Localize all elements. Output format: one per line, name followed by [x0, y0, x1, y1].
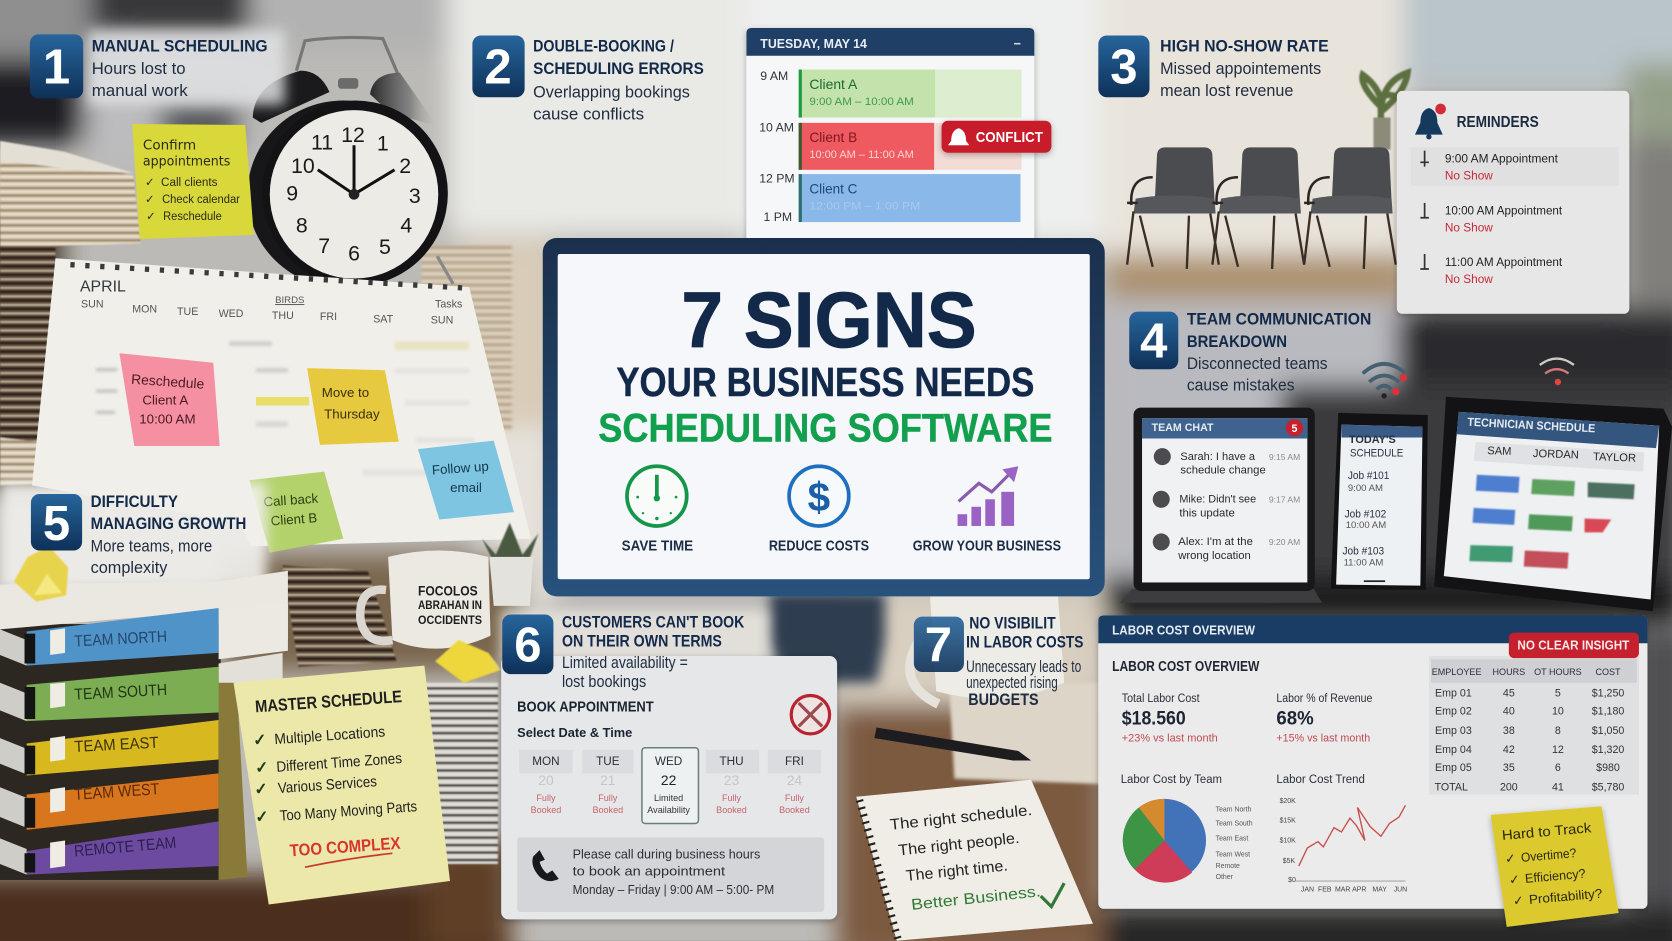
heading 5: difficulty managing growth: DIFFICULTY — [91, 492, 179, 511]
wall calendar: WED — [219, 308, 244, 320]
labor table: HOURS — [1493, 667, 1525, 677]
heading 4: team communication: TEAM COMMUNICATION — [1187, 309, 1371, 328]
labor table: Emp 01 — [1435, 688, 1472, 700]
sticky note: call back client B — [250, 472, 343, 553]
badge 2: 2 — [484, 40, 512, 94]
KPI: labor percent of revenue: 68% — [1276, 708, 1314, 729]
heading 2: double-booking: Overlapping bookings — [533, 82, 690, 101]
trend chart: MAY — [1372, 887, 1387, 894]
panel: reminders — [1397, 91, 1629, 314]
sticky note: confirm appointments: appointments — [143, 155, 230, 170]
laptop: team chat: wrong location — [1177, 550, 1251, 562]
icon: alarm clock: 3 — [409, 184, 421, 208]
wall calendar: APRIL — [80, 278, 126, 295]
notepad with message: The right schedule. — [889, 802, 1033, 834]
laptop: team chat: TEAM CHAT — [1152, 422, 1214, 434]
badge 3 — [1098, 35, 1150, 97]
heading 5: difficulty managing growth: complexity — [91, 558, 168, 577]
labor table: $1,320 — [1592, 744, 1624, 756]
date selector: 22 — [661, 772, 677, 788]
labor table: $1,050 — [1592, 725, 1624, 737]
crumpled papers — [14, 546, 501, 683]
panel: labor cost dashboard: LABOR COST OVERVIEW — [1112, 659, 1260, 675]
sticky note: confirm appointments: Call clients — [161, 176, 218, 189]
tablet: technician schedule — [1434, 397, 1672, 611]
client C booking — [799, 174, 1020, 222]
icon: alarm clock: 8 — [296, 214, 308, 238]
laptop: team chat: 9:17 AM — [1269, 494, 1300, 504]
master schedule note — [219, 666, 450, 904]
stacked team binders: REMOTE TEAM — [74, 835, 177, 860]
date selector: Fully — [598, 793, 618, 803]
master schedule note: ✓ — [254, 781, 268, 799]
laptop: team chat: this update — [1179, 507, 1235, 519]
icon: save time clock — [627, 466, 687, 526]
pie chart: Team South — [1216, 821, 1253, 828]
monitor stand — [770, 592, 885, 683]
panel: reminders: No Show — [1445, 169, 1493, 182]
client C booking: 12:00 PM – 1:00 PM — [809, 200, 920, 212]
badge 2 — [472, 35, 525, 97]
benefit labels: GROW YOUR BUSINESS — [913, 537, 1061, 554]
badge 4 — [1129, 312, 1178, 369]
panel: booking form: Select Date & Time — [517, 725, 632, 740]
notepad with message: The right time. — [905, 857, 1009, 885]
laptop: team chat: Mike: Didn't see — [1179, 493, 1256, 505]
date selector: WED — [655, 755, 682, 768]
trend chart: $15K — [1280, 817, 1296, 824]
labor table: COST — [1595, 667, 1621, 677]
trend chart: FEB — [1318, 887, 1332, 894]
icon: reduce costs dollar — [789, 466, 849, 526]
trend chart — [1276, 772, 1407, 894]
master schedule note: ✓ — [255, 809, 269, 826]
date selector: FRI — [785, 755, 804, 768]
sticky note: confirm appointments: ✓ — [146, 210, 156, 223]
heading 4: team communication: BREAKDOWN — [1187, 332, 1287, 351]
date selector: Limited — [654, 793, 683, 803]
icon: reduce costs dollar: $ — [808, 474, 830, 520]
icon: alarm clock: 9 — [286, 182, 298, 206]
icon: alarm clock: 5 — [379, 235, 391, 259]
wall calendar: THU — [272, 310, 294, 322]
wall calendar: TUE — [177, 306, 198, 318]
wall calendar: FRI — [320, 311, 337, 323]
labor table: Emp 04 — [1435, 744, 1472, 756]
tablet: technician schedule: JORDAN — [1533, 448, 1579, 462]
icon: alarm clock: 4 — [400, 214, 412, 238]
wall calendar: Tasks — [435, 298, 462, 310]
date selector: Booked — [592, 805, 623, 815]
stacked team binders: TEAM NORTH — [74, 629, 167, 650]
sticky note: hard to track — [1491, 806, 1619, 927]
heading 2: double-booking: cause conflicts — [533, 105, 644, 124]
plant and mug with text: ABRAHAN IN — [418, 599, 482, 612]
trend chart: $10K — [1280, 838, 1296, 845]
date selector: Fully — [722, 793, 742, 803]
heading 6: customers can't book: ON THEIR OWN TERMS — [562, 631, 722, 650]
panel: booking form — [501, 610, 837, 919]
panel: day calendar with conflict: 1 PM — [763, 210, 792, 224]
heading 6: customers can't book: Limited availability = — [562, 653, 688, 672]
client B booking: 10:00 AM – 11:00 AM — [809, 149, 914, 161]
heading 7: no visibility: NO VISIBILIT — [969, 613, 1056, 632]
sticky note: move to Thursday — [307, 368, 399, 445]
master schedule note: TOO COMPLEX — [289, 834, 402, 860]
labor table: 41 — [1552, 781, 1564, 793]
labor table: TOTAL — [1435, 781, 1468, 793]
trend chart: MAR — [1335, 887, 1350, 894]
badge 5 — [31, 494, 82, 551]
tablet: technician schedule: TECHNICIAN SCHEDULE — [1467, 416, 1596, 435]
trend chart: Labor Cost Trend — [1276, 772, 1365, 786]
icon: alarm clock: 6 — [348, 241, 360, 265]
heading 6: customers can't book: CUSTOMERS CAN'T BOOK — [562, 612, 745, 631]
phone: today's schedule: SCHEDULE — [1350, 448, 1403, 460]
icon: alarm clock: 7 — [318, 234, 330, 258]
laptop: team chat: 9:15 AM — [1269, 452, 1300, 462]
date selector: 24 — [787, 772, 802, 788]
sticky note: follow up email — [418, 441, 514, 520]
heading 6: customers can't book — [502, 612, 745, 691]
tablet: technician schedule: SAM — [1487, 445, 1512, 458]
sticky note: call back client B: Client B — [270, 510, 318, 528]
trend chart: $0 — [1288, 877, 1296, 884]
panel: reminders: REMINDERS — [1457, 114, 1539, 131]
icon: bell — [1415, 104, 1446, 139]
master schedule note: Multiple Locations — [274, 723, 386, 748]
title: YOUR BUSINESS NEEDS — [616, 359, 1034, 405]
date selector: 20 — [538, 772, 554, 788]
sticky note: confirm appointments: Confirm — [143, 139, 196, 154]
sticky note: confirm appointments — [132, 124, 254, 239]
panel: labor cost dashboard: LABOR COST OVERVIEW — [1112, 623, 1255, 638]
heading panel 5 backdrop — [0, 482, 267, 589]
KPI: labor percent of revenue: +15% vs last month — [1276, 732, 1370, 744]
phone notice: Monday – Friday | 9:00 AM – 5:00- PM — [573, 882, 774, 897]
KPI: total labor cost — [1122, 692, 1218, 744]
notepad with message: The right people. — [898, 830, 1020, 859]
plant and mug with text: FOCOLOS — [418, 582, 478, 598]
heading 1: manual scheduling — [30, 30, 285, 105]
no clear insight badge: NO CLEAR INSIGHT — [1517, 638, 1629, 653]
icon: alarm clock: 10 — [291, 154, 315, 178]
sticky note: hard to track: Profitability? — [1528, 886, 1603, 907]
title — [598, 276, 1052, 451]
date selector: Fully — [785, 793, 804, 803]
wall calendar: SAT — [373, 313, 394, 325]
date selector: Booked — [779, 805, 810, 815]
badge 1: 1 — [43, 40, 70, 94]
stacked team binders: TEAM WEST — [74, 781, 160, 804]
labor table: Emp 05 — [1435, 762, 1472, 774]
panel: reminders: 9:00 AM Appointment — [1445, 152, 1559, 165]
labor table: $1,180 — [1592, 706, 1624, 718]
badge 6: 6 — [514, 618, 541, 672]
phone: today's schedule: Job #101 — [1348, 470, 1389, 482]
phone: today's schedule — [1331, 413, 1428, 590]
laptop: team chat: 9:20 AM — [1269, 537, 1300, 547]
phone: today's schedule: Job #103 — [1343, 546, 1384, 558]
labor table: 5 — [1555, 688, 1561, 700]
notepad with message: Better Business. — [910, 883, 1042, 914]
sticky note: reschedule: Reschedule — [131, 371, 205, 392]
wall calendar: MON — [132, 304, 157, 316]
heading 1: manual scheduling: Hours lost to — [92, 59, 186, 78]
panel: reminders: 11:00 AM Appointment — [1445, 256, 1563, 269]
sticky note: reschedule: 10:00 AM — [139, 412, 196, 427]
laptop: team chat: 5 — [1292, 423, 1298, 435]
panel: reminders: No Show — [1445, 273, 1493, 286]
icon: wifi broken — [1363, 364, 1407, 399]
icon: alarm clock: 11 — [311, 131, 333, 155]
labor table: EMPLOYEE — [1432, 667, 1481, 677]
heading 3: no-show rate: mean lost revenue — [1160, 81, 1293, 100]
badge 7: 7 — [925, 618, 952, 672]
KPI: total labor cost: Total Labor Cost — [1122, 692, 1200, 705]
title: 7 SIGNS — [681, 276, 977, 364]
no clear insight badge — [1509, 633, 1639, 658]
icon: wifi red — [1540, 359, 1574, 385]
date selector: THU — [719, 755, 744, 768]
sticky note: hard to track: ✓ — [1512, 892, 1524, 908]
icon: growth chart — [958, 466, 1018, 526]
heading 1: manual scheduling: MANUAL SCHEDULING — [92, 36, 268, 55]
notepad with message — [856, 780, 1093, 941]
phone: today's schedule: Job #102 — [1345, 508, 1386, 520]
heading 7: no visibility: Unnecessary leads to — [966, 657, 1081, 676]
laptop: team chat: Alex: I'm at the — [1178, 536, 1253, 548]
client A booking: 9:00 AM – 10:00 AM — [809, 96, 914, 108]
trend chart: APR — [1352, 887, 1366, 894]
mug behind sign 7 — [910, 587, 1064, 704]
heading 6: customers can't book: lost bookings — [562, 672, 646, 691]
client A booking — [799, 70, 1022, 118]
sticky note: follow up email: Follow up — [431, 459, 489, 478]
conflict badge: CONFLICT — [976, 129, 1043, 146]
phone notice — [517, 837, 824, 912]
phone notice: to book an appointment — [573, 864, 726, 879]
panel: day calendar with conflict: 9 AM — [760, 69, 788, 83]
waiting room chairs — [1127, 147, 1396, 269]
laptop: team chat: schedule change — [1180, 465, 1266, 477]
master schedule note: Various Services — [277, 773, 377, 797]
panel: day calendar with conflict — [746, 28, 1051, 247]
sticky note: follow up email: email — [450, 480, 482, 495]
laptop: team chat — [1120, 408, 1322, 603]
date selector: Fully — [536, 793, 556, 803]
pie chart: Labor Cost by Team — [1121, 772, 1222, 786]
sticky note: reschedule: Client A — [142, 392, 188, 407]
labor table — [1429, 656, 1639, 795]
pie chart: Remote — [1216, 863, 1240, 870]
KPI: total labor cost: +23% vs last month — [1122, 732, 1218, 744]
heading 5: difficulty managing growth: More teams, more — [91, 537, 212, 556]
tablet: technician schedule: TAYLOR — [1593, 451, 1636, 465]
panel: booking form: BOOK APPOINTMENT — [517, 698, 654, 715]
trend chart: JUN — [1394, 887, 1407, 894]
sticky note: hard to track: Hard to Track — [1501, 819, 1592, 843]
heading 7: no visibility — [914, 613, 1083, 709]
labor table: 6 — [1555, 762, 1561, 774]
heading 2: double-booking: DOUBLE-BOOKING / — [533, 36, 674, 55]
sticky note: move to Thursday: Thursday — [324, 406, 380, 421]
badge 6 — [502, 614, 553, 674]
sticky note: reschedule — [119, 353, 220, 446]
master schedule note: ✓ — [255, 759, 269, 777]
plant and mug with text — [360, 523, 538, 649]
badge 4: 4 — [1140, 314, 1168, 368]
badge 7 — [914, 617, 964, 672]
pie chart: Team East — [1216, 836, 1248, 843]
date selector: Booked — [531, 805, 561, 815]
panel: reminders: 10:00 AM Appointment — [1445, 205, 1563, 218]
labor table: 10 — [1552, 706, 1564, 718]
heading 5: difficulty managing growth — [31, 492, 246, 577]
master schedule note: MASTER SCHEDULE — [254, 687, 403, 716]
date selector — [519, 748, 821, 823]
date selector: TUE — [596, 755, 620, 768]
pie chart: Team North — [1216, 807, 1252, 814]
date selector: 21 — [600, 772, 616, 788]
heading 5: difficulty managing growth: MANAGING GROWTH — [91, 514, 246, 533]
labor table: 42 — [1503, 744, 1515, 756]
sticky note: hard to track: Efficiency? — [1524, 866, 1586, 886]
labor table: $980 — [1596, 762, 1620, 774]
heading 7: no visibility: unexpected rising — [966, 673, 1058, 692]
labor table: Emp 02 — [1435, 706, 1472, 718]
plant — [1362, 73, 1408, 150]
sticky note: call back client B: Call back — [263, 491, 319, 510]
phone: today's schedule: 9:00 AM — [1348, 483, 1383, 494]
phone: today's schedule: TODAY'S — [1349, 434, 1396, 446]
icon: alarm clock — [247, 37, 453, 288]
pie chart: Team West — [1216, 852, 1250, 859]
heading 4: team communication — [1129, 309, 1371, 395]
labor table: OT HOURS — [1534, 667, 1582, 677]
wall calendar: SUN — [81, 298, 104, 310]
sticky note: confirm appointments: ✓ — [145, 176, 155, 189]
trend chart: JAN — [1301, 887, 1314, 894]
sticky note: hard to track: Overtime? — [1520, 845, 1577, 865]
wall calendar: BIRDS — [275, 295, 304, 306]
phone: today's schedule: 10:00 AM — [1346, 520, 1386, 531]
heading 2: double-booking: SCHEDULING ERRORS — [533, 59, 704, 78]
icon: alarm clock: 2 — [399, 154, 411, 178]
sticky note: move to Thursday: Move to — [322, 385, 369, 400]
labor table: 200 — [1500, 781, 1518, 793]
laptop: team chat: Sarah: I have a — [1180, 451, 1256, 463]
stacked team binders: TEAM SOUTH — [74, 682, 167, 704]
stacked team binders: TEAM EAST — [74, 735, 159, 756]
heading 2: double-booking — [472, 35, 704, 124]
master schedule note: Too Many Moving Parts — [279, 798, 418, 825]
paper stacks — [0, 141, 512, 864]
labor table: 45 — [1503, 688, 1515, 700]
heading 1: manual scheduling: manual work — [92, 81, 188, 100]
labor table: 38 — [1503, 725, 1515, 737]
heading 7: no visibility: IN LABOR COSTS — [966, 633, 1083, 652]
panel: day calendar with conflict: 10 AM — [759, 120, 794, 134]
wall calendar: SUN — [431, 314, 453, 326]
date selector: Booked — [716, 805, 747, 815]
icon: unavailable — [791, 695, 830, 734]
trend chart: $5K — [1283, 858, 1295, 865]
heading 7: no visibility: BUDGETS — [968, 690, 1039, 709]
heading 3: no-show rate — [1098, 35, 1329, 100]
date selector: Availability — [647, 805, 690, 815]
trend chart: $20K — [1280, 798, 1296, 805]
heading 3: no-show rate: HIGH NO-SHOW RATE — [1160, 36, 1329, 55]
paper under mug and pen — [949, 683, 1100, 784]
stacked team binders — [0, 571, 288, 880]
title: SCHEDULING SOFTWARE — [598, 407, 1052, 451]
icon: alarm clock: 1 — [377, 132, 389, 156]
date selector: 23 — [724, 772, 739, 788]
heading 4: team communication: cause mistakes — [1187, 376, 1295, 395]
conflict badge — [942, 121, 1051, 153]
master schedule note: Different Time Zones — [276, 750, 403, 776]
labor table: $5,780 — [1592, 781, 1624, 793]
main monitor — [543, 238, 1105, 596]
date selector: MON — [532, 755, 560, 768]
panel: day calendar with conflict: TUESDAY, MAY 14 — [760, 36, 867, 51]
KPI: labor percent of revenue: Labor % of Revenue — [1276, 692, 1372, 705]
panel: labor cost dashboard — [1098, 616, 1647, 909]
phone notice: Please call during business hours — [573, 847, 760, 862]
heading 4: team communication: Disconnected teams — [1187, 354, 1328, 373]
labor table: $1,250 — [1592, 688, 1624, 700]
labor table: 12 — [1552, 744, 1564, 756]
client C booking: Client C — [809, 180, 857, 196]
sticky note: hard to track: ✓ — [1504, 850, 1516, 866]
labor table: 40 — [1503, 706, 1515, 718]
heading 3: no-show rate: Missed appointements — [1160, 59, 1321, 78]
KPI: total labor cost: $18.560 — [1122, 708, 1186, 729]
badge 5: 5 — [43, 497, 70, 551]
sticky note: confirm appointments: Reschedule — [163, 210, 222, 223]
icon: alarm clock: 12 — [341, 123, 365, 147]
KPI: labor percent of revenue — [1276, 692, 1372, 744]
pen — [874, 727, 1031, 761]
sticky note: confirm appointments: ✓ — [145, 193, 155, 206]
benefit labels: SAVE TIME — [622, 537, 693, 554]
pie chart — [1121, 772, 1253, 883]
labor table: 35 — [1503, 762, 1515, 774]
client B booking — [799, 123, 1022, 170]
pie chart: Other — [1216, 874, 1234, 881]
badge 3: 3 — [1110, 40, 1138, 94]
plant and mug with text: OCCIDENTS — [418, 613, 482, 627]
client B booking: Client B — [809, 129, 857, 145]
sticky note: confirm appointments: Check calendar — [162, 193, 240, 206]
labor table: 8 — [1555, 725, 1561, 737]
panel: reminders: No Show — [1445, 222, 1493, 235]
badge 1 — [30, 34, 83, 98]
benefit labels — [622, 537, 1061, 554]
wall calendar — [32, 258, 531, 546]
sticky note: hard to track: ✓ — [1508, 871, 1520, 887]
panel: day calendar with conflict: 12 PM — [759, 172, 795, 186]
benefit labels: REDUCE COSTS — [769, 537, 869, 554]
client A booking: Client A — [809, 76, 858, 92]
phone: today's schedule: 11:00 AM — [1344, 557, 1383, 568]
labor table: Emp 03 — [1435, 725, 1472, 737]
master schedule note: ✓ — [253, 732, 267, 750]
